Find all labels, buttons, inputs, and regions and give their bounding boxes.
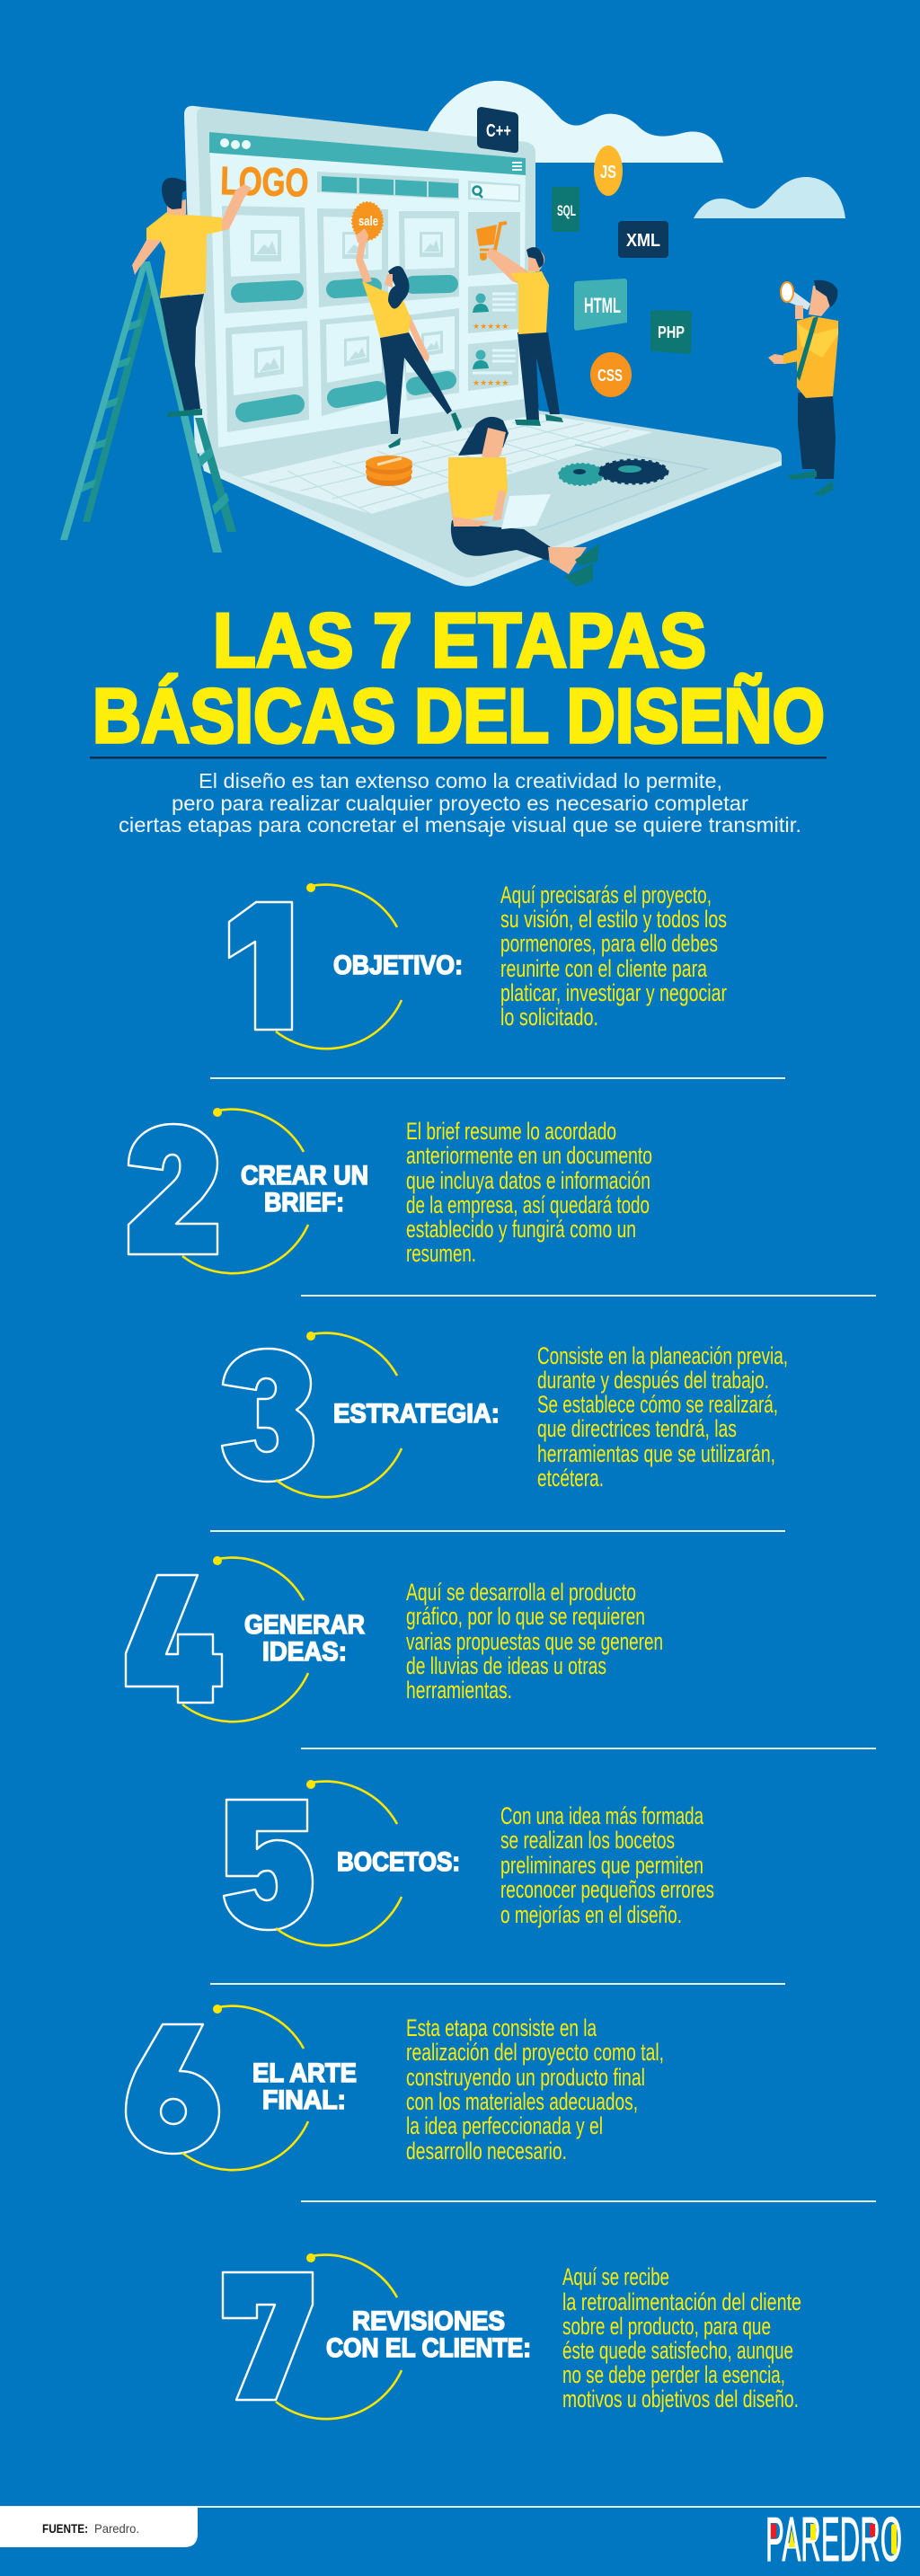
intro text: ciertas etapas para concretar el mensaje visual que se quiere transmitir. <box>119 813 801 837</box>
description: la idea perfeccionada y el <box>406 2112 603 2139</box>
number 5 <box>224 1800 313 1930</box>
laptop <box>184 106 782 586</box>
description: de lluvias de ideas u otras <box>406 1652 606 1679</box>
description: Aquí se recibe <box>562 2263 669 2290</box>
ring <box>276 1332 402 1497</box>
product card 1 <box>222 206 307 314</box>
step 5 <box>224 1780 714 1945</box>
description: gráfico, por lo que se requieren <box>406 1603 645 1630</box>
megaphone <box>781 282 810 319</box>
title: BÁSICAS DEL DISEÑO <box>93 673 825 759</box>
tag: SQL: SQL <box>557 202 576 219</box>
description: durante y después del trabajo. <box>537 1367 769 1394</box>
trackpad line <box>539 445 707 530</box>
browser dots <box>220 138 251 149</box>
sitting woman <box>448 417 599 587</box>
heading: EL ARTE <box>252 2058 357 2088</box>
description: o mejorías en el diseño. <box>500 1901 682 1928</box>
number 3 <box>222 1349 314 1482</box>
description: de la empresa, así quedará todo <box>406 1191 650 1218</box>
description: sobre el producto, para que <box>562 2313 771 2340</box>
sale badge: sale <box>358 214 378 229</box>
description: motivos u objetivos del diseño. <box>562 2386 799 2412</box>
description: Aquí se desarrolla el producto <box>406 1579 636 1606</box>
tag: C++: C++ <box>486 121 511 141</box>
number 4 <box>126 1575 222 1703</box>
person on ladder <box>132 178 252 417</box>
heading: REVISIONES <box>352 2306 505 2336</box>
description: herramientas que se utilizarán, <box>537 1440 775 1467</box>
heading: BRIEF: <box>264 1188 344 1217</box>
description: se realizan los bocetos <box>500 1827 675 1854</box>
heading: ESTRATEGIA: <box>333 1399 500 1429</box>
heading: CON EL CLIENTE: <box>326 2333 531 2363</box>
description: varias propuestas que se generen <box>406 1628 663 1655</box>
description <box>537 1342 788 1492</box>
description: Aquí precisarás el proyecto, <box>500 881 712 908</box>
description: realización del proyecto como tal, <box>406 2039 664 2066</box>
description <box>562 2263 801 2412</box>
ring <box>182 1108 308 1273</box>
number 6 <box>126 2024 219 2154</box>
number 2 <box>128 1124 217 1254</box>
laptop screen frame <box>184 106 535 454</box>
title: LAS 7 ETAPAS <box>213 598 706 684</box>
step 7 <box>223 2253 801 2419</box>
description: desarrollo necesario. <box>406 2138 567 2164</box>
laptop base <box>195 395 782 586</box>
browser bar <box>209 132 526 175</box>
product card 4 <box>226 321 309 432</box>
description: no se debe perder la esencia, <box>562 2361 785 2388</box>
description: Con una idea más formada <box>500 1802 704 1829</box>
heading: GENERAR <box>244 1610 365 1640</box>
nav bar <box>317 172 459 199</box>
sale badge <box>352 202 383 240</box>
description: resumen. <box>406 1240 476 1267</box>
step 6 <box>126 2005 664 2170</box>
review card 1 <box>468 284 518 333</box>
description: lo solicitado. <box>500 1004 598 1031</box>
description <box>406 1579 663 1704</box>
description: establecido y fungirá como un <box>406 1216 636 1243</box>
tag: CSS <box>590 352 632 397</box>
tag: HTML <box>574 279 627 331</box>
tag: PHP: PHP <box>658 323 685 341</box>
number 7 <box>223 2272 313 2400</box>
heading <box>241 1161 368 1217</box>
tag: XML: XML <box>626 231 660 251</box>
heading <box>244 1610 365 1667</box>
ring <box>182 1556 308 1722</box>
description: su visión, el estilo y todos los <box>500 906 727 933</box>
product card 6 <box>400 308 459 401</box>
tag: XML <box>618 221 668 258</box>
description: pormenores, para ello debes <box>500 930 718 957</box>
tag: PHP <box>650 310 692 354</box>
description: etcétera. <box>537 1465 604 1492</box>
gear: teal <box>559 464 604 485</box>
description: la retroalimentación del cliente <box>562 2288 801 2315</box>
product card 5 <box>320 313 388 416</box>
heading: CREAR UN <box>241 1161 368 1191</box>
step 2 <box>128 1108 652 1273</box>
man with megaphone <box>768 280 838 496</box>
description: reconocer pequeños errores <box>500 1876 714 1903</box>
cart card <box>468 212 520 276</box>
man with cart <box>486 247 563 426</box>
intro text <box>119 769 801 837</box>
woman with sale badge <box>352 202 462 448</box>
description: Consiste en la planeación previa, <box>537 1342 788 1369</box>
step 4 <box>126 1556 663 1722</box>
heading <box>252 2058 357 2115</box>
ring <box>276 883 402 1049</box>
description: reunirte con el cliente para <box>500 955 708 982</box>
source tab: Paredro. <box>94 2521 139 2536</box>
coin stack <box>366 456 412 486</box>
ladder <box>60 261 236 553</box>
review card 1: ★★★★★ <box>473 322 509 331</box>
ring <box>182 2005 308 2170</box>
source tab <box>0 2507 198 2547</box>
gear: navy <box>599 460 668 483</box>
intro text: El diseño es tan extenso como la creatividad lo permite, <box>199 769 722 792</box>
ring <box>276 2253 402 2419</box>
tag: JS: JS <box>600 163 616 182</box>
tag: SQL <box>552 187 579 232</box>
description: con los materiales adecuados, <box>406 2088 638 2115</box>
heading: IDEAS: <box>262 1637 347 1667</box>
description <box>406 1118 652 1267</box>
intro text: pero para realizar cualquier proyecto es necesario completar <box>172 792 748 815</box>
product card 3 <box>399 211 459 301</box>
hero illustration <box>60 81 845 587</box>
description: platicar, investigar y negociar <box>500 979 727 1006</box>
tag: CSS: CSS <box>597 367 623 385</box>
heading <box>326 2306 531 2363</box>
description: que directrices tendrá, las <box>537 1415 737 1442</box>
description <box>406 2014 664 2164</box>
description: construyendo un producto final <box>406 2064 645 2091</box>
review card 2: ★★★★★ <box>473 378 509 387</box>
heading: OBJETIVO: <box>333 951 463 980</box>
description <box>500 1802 714 1928</box>
heading: BOCETOS: <box>337 1847 460 1877</box>
logo text: LOGO <box>220 159 309 206</box>
search box <box>468 181 520 202</box>
cloud: large <box>395 81 723 163</box>
tag: C++ <box>477 107 518 153</box>
tag: HTML: HTML <box>584 294 621 318</box>
ring <box>276 1780 402 1945</box>
description: que incluya datos e información <box>406 1167 650 1194</box>
step 1 <box>229 881 727 1049</box>
tag: JS <box>594 146 623 196</box>
description: El brief resume lo acordado <box>406 1118 616 1145</box>
description: Se establece cómo se realizará, <box>537 1391 778 1418</box>
heading: FINAL: <box>262 2085 346 2115</box>
description: Esta etapa consiste en la <box>406 2014 597 2041</box>
keyboard <box>240 414 653 514</box>
hamburger icon <box>512 163 522 170</box>
description: éste quede satisfecho, aunque <box>562 2337 793 2364</box>
number 1 <box>229 902 292 1030</box>
step 3 <box>222 1332 788 1497</box>
review card 2 <box>468 340 518 391</box>
title <box>93 598 825 759</box>
product card 2 <box>317 208 388 307</box>
cloud: small <box>694 177 845 218</box>
laptop screen display <box>209 132 526 447</box>
description: anteriormente en un documento <box>406 1142 652 1169</box>
description <box>500 881 727 1031</box>
source tab: FUENTE: <box>42 2521 88 2536</box>
description: herramientas. <box>406 1677 512 1704</box>
description: preliminares que permiten <box>500 1852 703 1879</box>
